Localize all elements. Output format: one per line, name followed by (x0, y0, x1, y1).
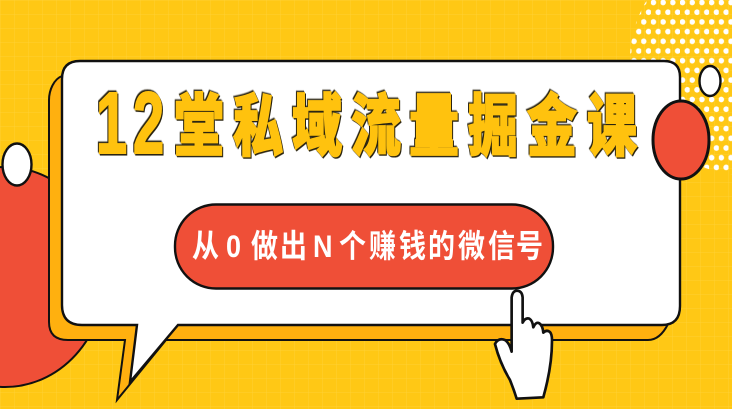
left red circle (0, 167, 105, 387)
right red circle (653, 101, 709, 179)
title: 12 (96, 74, 164, 172)
subtitle: 从0做出N个赚钱的微信号 (192, 229, 543, 265)
dot pattern (630, 0, 732, 175)
bubble body (62, 61, 680, 382)
right small white circle (700, 66, 720, 96)
icon: pointing hand (495, 291, 552, 399)
left small white circle (2, 144, 32, 186)
speech bubble (49, 61, 680, 400)
bubble shadow (49, 76, 668, 400)
subtitle pill (175, 204, 553, 288)
title: 堂私域流量掘金课 (174, 89, 638, 165)
title (96, 74, 638, 172)
